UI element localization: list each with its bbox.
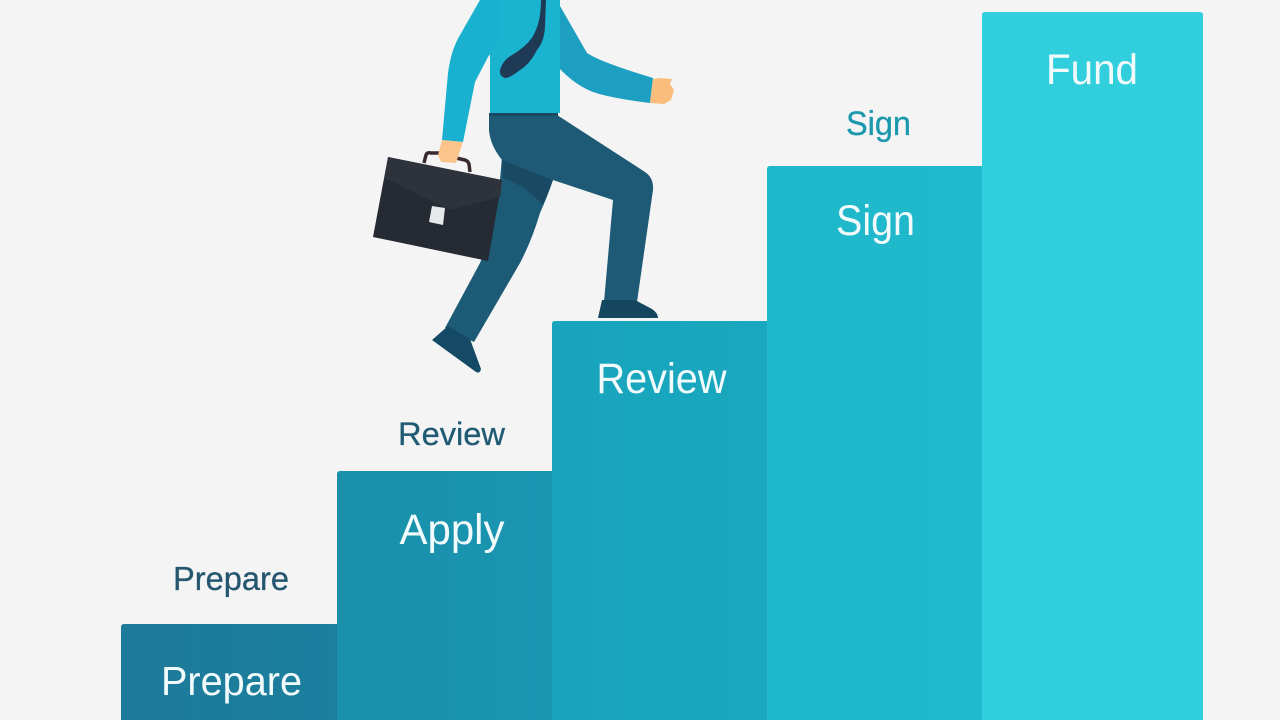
case flap <box>385 157 502 210</box>
right hand <box>650 78 674 104</box>
step: Apply <box>337 471 552 720</box>
label: Prepare: Prepare <box>173 560 289 597</box>
necktie <box>500 0 546 78</box>
clasp <box>429 206 445 225</box>
step: Review <box>552 321 767 720</box>
rear shoe <box>432 326 481 373</box>
front shoe <box>598 300 658 318</box>
front leg and hips <box>489 115 653 302</box>
step: Fund: Fund <box>1046 46 1138 94</box>
right arm <box>559 6 653 103</box>
briefcase <box>373 153 502 261</box>
label: Sign: Sign <box>846 105 911 143</box>
figure: businessman climbing stairs <box>373 0 674 373</box>
step: Fund <box>982 12 1203 720</box>
case body <box>373 157 502 261</box>
rear leg <box>445 157 553 342</box>
torso <box>490 0 560 113</box>
step: Apply: Apply <box>400 506 505 554</box>
rear leg shadow <box>502 160 553 205</box>
step: Prepare <box>121 624 337 720</box>
left arm <box>442 0 500 142</box>
step: Sign: Sign <box>836 197 915 245</box>
handle <box>424 153 470 172</box>
left hand <box>438 140 463 163</box>
step: Sign <box>767 166 982 720</box>
waistband <box>489 113 558 116</box>
step: Review: Review <box>596 355 727 403</box>
step: Prepare: Prepare <box>161 658 302 704</box>
label: Review: Review <box>398 416 506 452</box>
